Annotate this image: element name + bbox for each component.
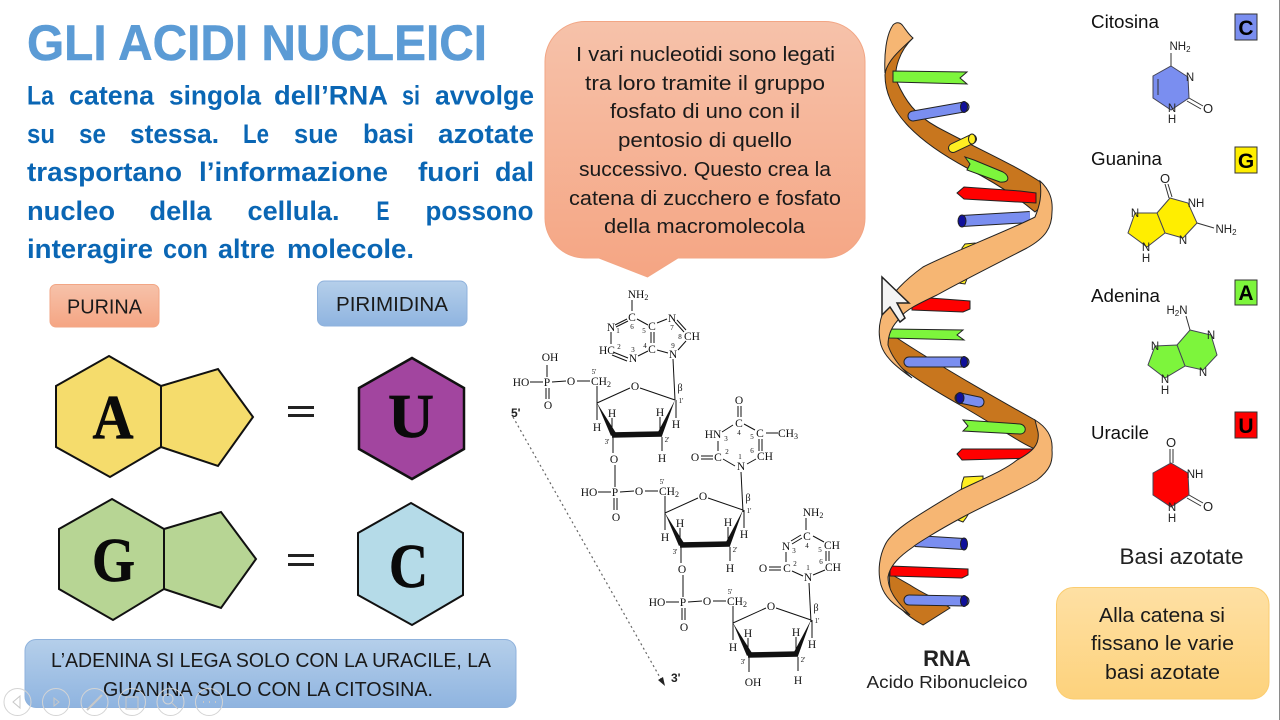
base: adenina: 2: [1175, 309, 1180, 318]
sugar phosphate 2: O: [612, 512, 620, 524]
callout: speech bubble: successivo. Questo crea la: [579, 158, 832, 181]
base: adenina: N: [1179, 305, 1188, 317]
sugar phosphate 1: 1': [679, 397, 683, 405]
sugar phosphate 1: O: [544, 400, 552, 412]
base: guanina: NH: [1188, 198, 1204, 210]
nucleotide 1 with adenine: 7: [670, 324, 674, 332]
base: adenina: N: [1161, 374, 1169, 386]
base 3 cytosine: CH: [824, 540, 840, 552]
text block: RNA description: si: [402, 80, 420, 110]
sugar phosphate 3: O: [703, 596, 711, 608]
base: uracile: U: [1238, 415, 1254, 438]
base 3 cytosine: C: [783, 563, 791, 575]
sugar phosphate 3: OH: [745, 677, 761, 689]
nucleotide 1 with adenine: N: [668, 313, 677, 325]
base: adenina: A: [1238, 282, 1254, 305]
callout: speech bubble: tra loro tramite il gruppo: [585, 72, 825, 95]
text block: RNA description: con: [163, 234, 208, 264]
nucleotide 1 with adenine: 2: [617, 343, 621, 351]
sugar phosphate 3: CH: [727, 596, 743, 608]
base: uracile: O: [1203, 499, 1213, 514]
sugar phosphate 2: H: [661, 532, 669, 544]
callout: bases attach to chain: [1056, 588, 1269, 699]
base 3 cytosine: 2: [819, 511, 823, 520]
sugar phosphate 1: O: [631, 381, 639, 393]
base 2 thymine: HN: [705, 429, 722, 441]
base: citosina: O: [1203, 101, 1213, 116]
nucleotide 1 with adenine: 2: [644, 293, 648, 302]
base: uracile: [1091, 412, 1257, 525]
sugar phosphate 3: H: [729, 642, 737, 654]
callout: speech bubble: catena di zucchero e fosfato: [569, 187, 841, 210]
text block: RNA description: sue: [294, 119, 338, 149]
base: guanina: NH: [1215, 224, 1232, 236]
base 3 cytosine: C: [803, 531, 811, 543]
base: uracile: Uracile: [1091, 422, 1149, 443]
base 3 cytosine: 2: [793, 560, 797, 568]
base 2 thymine: 2: [725, 448, 729, 456]
sugar phosphate 3: H: [744, 628, 752, 640]
label: pirimidina: [318, 281, 467, 326]
nucleotide 1 with adenine: N: [607, 322, 616, 334]
base 2 thymine: CH: [778, 428, 794, 440]
base 3 cytosine: O: [759, 563, 767, 575]
text block: RNA description: cellula.: [248, 196, 340, 226]
callout: speech bubble: I vari nucleotidi sono legati: [576, 43, 835, 66]
callout: base pairing rule: GUANINA SOLO CON LA CITOSINA.: [103, 678, 433, 701]
callout: speech bubble: della macromolecola: [604, 215, 806, 238]
base: guanina: N: [1131, 208, 1139, 220]
sugar phosphate 2: H: [724, 517, 732, 529]
text block: RNA description: interagire: [27, 234, 153, 264]
label: RNA: RNA: [923, 646, 971, 671]
text block: RNA description: avvolge: [435, 80, 534, 110]
label: purina: [50, 284, 159, 327]
base 2 thymine: 4: [737, 429, 741, 437]
base 3 cytosine: 5: [818, 546, 822, 554]
sugar phosphate 2: 2': [733, 546, 737, 554]
text block: RNA description: molecole.: [287, 234, 414, 264]
sugar phosphate 1: HO: [513, 377, 529, 389]
backbone: brown strands: [885, 38, 1043, 625]
nucleotide 1 with adenine: CH: [684, 331, 700, 343]
base 2 thymine: C: [735, 418, 743, 430]
sugar phosphate 3: H: [792, 627, 800, 639]
title: GLI ACIDI NUCLEICI: [27, 15, 487, 71]
sugar phosphate 1: CH: [591, 376, 607, 388]
sugar phosphate 1: β: [677, 383, 683, 394]
diagram: guanine pairs with cytosine: [59, 499, 463, 625]
arrow: 5' to 3' direction: 5': [511, 406, 521, 420]
sugar phosphate 3: O: [680, 622, 688, 634]
nucleotide 1 with adenine: 9: [671, 342, 675, 350]
text block: RNA description: E: [376, 196, 390, 226]
label: RNA: Acido Ribonucleico: [866, 672, 1028, 692]
text block: RNA description: La: [27, 80, 54, 110]
text block: RNA description: altre: [218, 234, 275, 264]
base: citosina: N: [1168, 103, 1176, 115]
sugar phosphate 1: 5': [592, 368, 596, 376]
base: guanina: [1091, 147, 1257, 265]
sugar phosphate 1: 3': [605, 438, 609, 446]
sugar phosphate 2: H: [740, 529, 748, 541]
base: uracile: O: [1166, 435, 1176, 450]
nucleotide 1 with adenine: N: [669, 349, 678, 361]
base 3 cytosine: 6: [819, 558, 823, 566]
text block: RNA description: basi: [363, 119, 414, 149]
base: citosina: H: [1168, 114, 1176, 126]
diagram: adenine pairs with uracil: A: [92, 384, 134, 452]
sugar phosphate 1: O: [610, 454, 618, 466]
callout: base pairing rule: [25, 640, 516, 708]
sugar phosphate 3: 2': [801, 656, 805, 664]
base: uracile: NH: [1187, 469, 1203, 481]
icon: mouse cursor: [882, 277, 909, 322]
sugar phosphate 2: CH: [659, 486, 675, 498]
base 3 cytosine: CH: [825, 562, 841, 574]
sugar phosphate 2: 1': [747, 507, 751, 515]
nucleotide 1 with adenine: [599, 289, 700, 400]
sugar phosphate 1: [513, 352, 683, 487]
text block: RNA description: [27, 80, 534, 264]
base 2 thymine: N: [737, 461, 746, 473]
sugar phosphate 1: H: [608, 408, 616, 420]
base: adenina: H: [1166, 305, 1175, 317]
nucleotide 1 with adenine: 4: [643, 342, 647, 350]
sugar phosphate 3: P: [680, 597, 686, 609]
base: uracile: N: [1168, 502, 1176, 514]
sugar phosphate 3: H: [794, 675, 802, 687]
nucleotide 1 with adenine: 3: [631, 346, 635, 354]
label: pirimidina: PIRIMIDINA: [336, 293, 448, 316]
ribbon: front strands: [879, 181, 1052, 615]
ribbon tip: [885, 23, 913, 73]
sugar phosphate 2: H: [676, 518, 684, 530]
base 2 thymine: C: [756, 428, 764, 440]
nucleotide 1 with adenine: 6: [630, 323, 634, 331]
sugar phosphate 1: P: [544, 377, 550, 389]
base: citosina: NH: [1169, 41, 1186, 53]
text block: RNA description: dell’RNA: [274, 80, 388, 110]
sugar phosphate 2: β: [745, 493, 751, 504]
text block: RNA description: Le: [243, 119, 269, 149]
arrow: 5' to 3' direction: 3': [671, 671, 681, 685]
nucleotide 1 with adenine: HC: [599, 345, 615, 357]
sugar phosphate 1: H: [672, 419, 680, 431]
diagram: guanine pairs with cytosine: C: [389, 533, 428, 601]
base 2 thymine: [691, 395, 798, 512]
base: adenina: N: [1199, 367, 1207, 379]
sugar phosphate 2: [581, 478, 751, 597]
nucleotide 1 with adenine: NH: [628, 289, 644, 301]
sugar phosphate 2: O: [678, 564, 686, 576]
sugar phosphate 3: H: [808, 639, 816, 651]
base: guanina: N: [1179, 235, 1187, 247]
base 3 cytosine: N: [804, 572, 813, 584]
callout: speech bubble: fosfato di uno con il: [610, 100, 800, 123]
diagram: adenine pairs with uracil: U: [388, 383, 434, 451]
text block: RNA description: nucleo: [27, 196, 115, 226]
sugar phosphate 1: O: [567, 376, 575, 388]
nucleotide 1 with adenine: 5: [642, 327, 646, 335]
base 3 cytosine: NH: [803, 507, 819, 519]
base: adenina: [1091, 280, 1257, 397]
base: citosina: Citosina: [1091, 11, 1160, 32]
sugar phosphate 2: 5': [660, 478, 664, 486]
sugar phosphate 1: H: [593, 422, 601, 434]
text block: RNA description: singola: [169, 80, 261, 110]
callout: bases attach to chain: basi azotate: [1105, 661, 1220, 684]
caption: basi azotate: Basi azotate: [1120, 544, 1244, 569]
sugar phosphate 1: 2': [665, 436, 669, 444]
base: uracile: H: [1168, 513, 1176, 525]
base 3 cytosine: N: [782, 541, 791, 553]
base: guanina: Guanina: [1091, 148, 1163, 169]
nitrogenous base bars: [889, 71, 1036, 606]
callout: bases attach to chain: fissano le varie: [1091, 632, 1234, 655]
text block: RNA description: dal: [495, 157, 534, 187]
sugar phosphate 2: H: [726, 563, 734, 575]
text block: RNA description: catena: [69, 80, 154, 110]
base 2 thymine: C: [714, 452, 722, 464]
callout: base pairing rule: L’ADENINA SI LEGA SOLO CON LA URACILE, LA: [51, 649, 491, 672]
text block: RNA description: azotate: [438, 119, 534, 149]
nucleotide 1 with adenine: C: [648, 321, 656, 333]
arrow: 5' to 3' direction: [511, 406, 681, 686]
base 2 thymine: 1: [738, 453, 742, 461]
icon group: slideshow controls: [4, 688, 222, 716]
sugar phosphate 3: β: [813, 603, 819, 614]
base: adenina: N: [1151, 341, 1159, 353]
text block: RNA description: su: [27, 119, 55, 149]
base 2 thymine: 5: [750, 433, 754, 441]
sugar phosphate 1: H: [658, 453, 666, 465]
diagram: guanine pairs with cytosine: G: [92, 527, 135, 595]
sugar phosphate 2: O: [699, 491, 707, 503]
base 2 thymine: 6: [750, 447, 754, 455]
label: RNA: [866, 646, 1028, 692]
nucleotide 1 with adenine: C: [628, 312, 636, 324]
callout: bases attach to chain: Alla catena si: [1099, 604, 1225, 627]
text block: RNA description: fuori: [418, 157, 480, 187]
base 3 cytosine: [759, 507, 841, 622]
base: citosina: C: [1238, 17, 1254, 40]
base 3 cytosine: 1: [806, 564, 810, 572]
base: guanina: H: [1142, 253, 1150, 265]
sugar phosphate 3: 3': [741, 658, 745, 666]
nucleotide 1 with adenine: C: [648, 344, 656, 356]
base: adenina: Adenina: [1091, 285, 1161, 306]
base 2 thymine: O: [735, 395, 743, 407]
text block: RNA description: della: [150, 196, 212, 226]
chart: nucleotide chain structural formula: [513, 289, 841, 689]
base: citosina: N: [1186, 72, 1194, 84]
sugar phosphate 1: H: [656, 407, 664, 419]
base 2 thymine: 3: [724, 435, 728, 443]
base: adenina: N: [1207, 330, 1215, 342]
sugar phosphate 2: 2: [675, 490, 679, 499]
text block: RNA description: possono: [426, 196, 534, 226]
text block: RNA description: l’informazione: [199, 157, 388, 187]
base 2 thymine: CH: [757, 451, 773, 463]
nucleotide 1 with adenine: 1: [616, 327, 620, 335]
text block: RNA description: se: [79, 119, 106, 149]
text block: RNA description: stessa.: [130, 119, 219, 149]
base: guanina: O: [1160, 171, 1170, 186]
base: adenina: H: [1161, 385, 1169, 397]
sugar phosphate 3: 1': [815, 617, 819, 625]
callout: speech bubble: pentosio di quello: [618, 129, 792, 152]
sugar phosphate 3: HO: [649, 597, 665, 609]
base: guanina: N: [1142, 242, 1150, 254]
illustration: RNA helix: [879, 23, 1052, 625]
sugar phosphate 3: [649, 588, 819, 689]
sugar phosphate 1: 2: [607, 380, 611, 389]
sugar phosphate 3: O: [767, 601, 775, 613]
base 3 cytosine: 4: [805, 542, 809, 550]
text block: RNA description: trasportano: [27, 157, 182, 187]
base: citosina: [1091, 11, 1257, 126]
label: purina: PURINA: [67, 296, 142, 318]
base: citosina: 2: [1186, 45, 1191, 54]
sugar phosphate 2: O: [635, 486, 643, 498]
nucleotide 1 with adenine: 8: [678, 333, 682, 341]
nucleotide 1 with adenine: N: [629, 353, 638, 365]
base: guanina: G: [1238, 150, 1254, 173]
sugar phosphate 3: 5': [728, 588, 732, 596]
sugar phosphate 3: 2: [743, 600, 747, 609]
diagram: adenine pairs with uracil: [56, 356, 464, 479]
base 2 thymine: O: [691, 452, 699, 464]
sugar phosphate 2: P: [612, 487, 618, 499]
base 2 thymine: 3: [794, 432, 798, 441]
sugar phosphate 2: HO: [581, 487, 597, 499]
callout: speech bubble: [545, 22, 865, 277]
sugar phosphate 1: OH: [542, 352, 558, 364]
sugar phosphate 2: 3': [673, 548, 677, 556]
base 3 cytosine: 3: [792, 547, 796, 555]
base: guanina: 2: [1232, 228, 1237, 237]
